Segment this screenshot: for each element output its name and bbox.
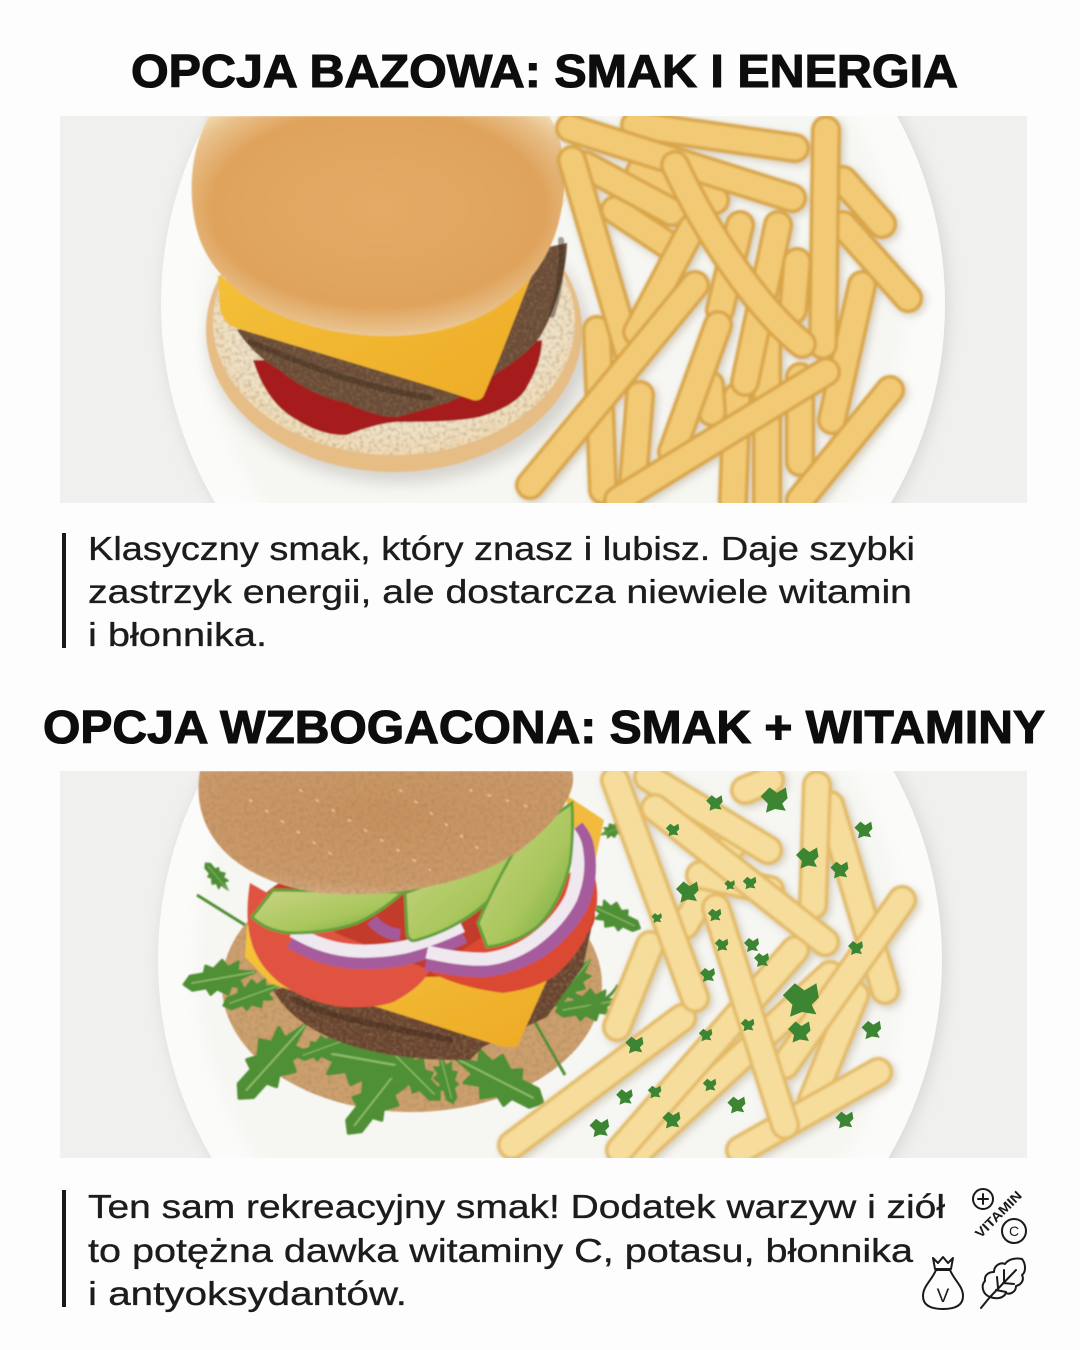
patty char marks [250, 240, 562, 398]
description: enriched option: Ten sam rekreacyjny smak! Dodatek warzyw i ziół [88, 1189, 946, 1226]
cheese slice [218, 195, 567, 400]
table background [60, 116, 1027, 503]
parsley flakes [590, 787, 881, 1137]
top bun [192, 116, 565, 336]
description: base option [88, 531, 915, 654]
tomato slices [247, 883, 430, 1007]
avocado slices [252, 890, 403, 933]
icon: vitamin C badge: C [1009, 1223, 1019, 1239]
fries with herbs [512, 777, 902, 1150]
fries [530, 125, 908, 505]
bottom wholegrain bun [222, 921, 603, 1113]
tomato filling [266, 882, 596, 978]
bun grain texture [250, 790, 540, 870]
enriched burger [181, 771, 645, 1146]
icon: potassium bag: V [937, 1286, 950, 1307]
description: enriched option: i antyoksydantów. [88, 1276, 407, 1313]
title: base option: OPCJA BAZOWA: SMAK I ENERGIA [131, 45, 958, 97]
burger shadow [204, 265, 592, 488]
white plate [160, 116, 952, 503]
description: enriched option: to potężna dawka witaminy C, potasu, błonnika [88, 1233, 913, 1270]
classic burger [192, 116, 590, 482]
description bar: base option [62, 533, 66, 648]
title: enriched option: OPCJA WZBOGACONA: SMAK + WITAMINY [43, 701, 1045, 753]
table background [60, 771, 1027, 1158]
icon: potassium bag [923, 1257, 963, 1309]
beef patty [237, 243, 567, 417]
ketchup [253, 340, 542, 435]
description: base option: zastrzyk energii, ale dostarcza niewiele witamin [88, 574, 912, 611]
icon: oak leaf [981, 1259, 1025, 1308]
red onion rings [372, 920, 400, 935]
cheese slice [245, 925, 547, 1047]
description: base option: Klasyczny smak, który znasz i lubisz. Daje szybki [88, 531, 915, 568]
bottom bun [205, 270, 582, 473]
arugula leaves [181, 818, 645, 1146]
arugula stems [197, 895, 618, 1075]
patty char marks [295, 1000, 450, 1040]
wholegrain top bun [198, 771, 573, 894]
white plate [157, 771, 949, 1158]
photo: classic burger and fries [60, 116, 1027, 503]
description: base option: i błonnika. [88, 617, 267, 654]
photo: enriched burger and fries [60, 771, 1027, 1158]
description: enriched option [88, 1189, 946, 1313]
beef patty [273, 925, 592, 1060]
icon: vitamin C badge: VITAMIN [972, 1188, 1025, 1241]
description bar: enriched option [62, 1190, 66, 1307]
